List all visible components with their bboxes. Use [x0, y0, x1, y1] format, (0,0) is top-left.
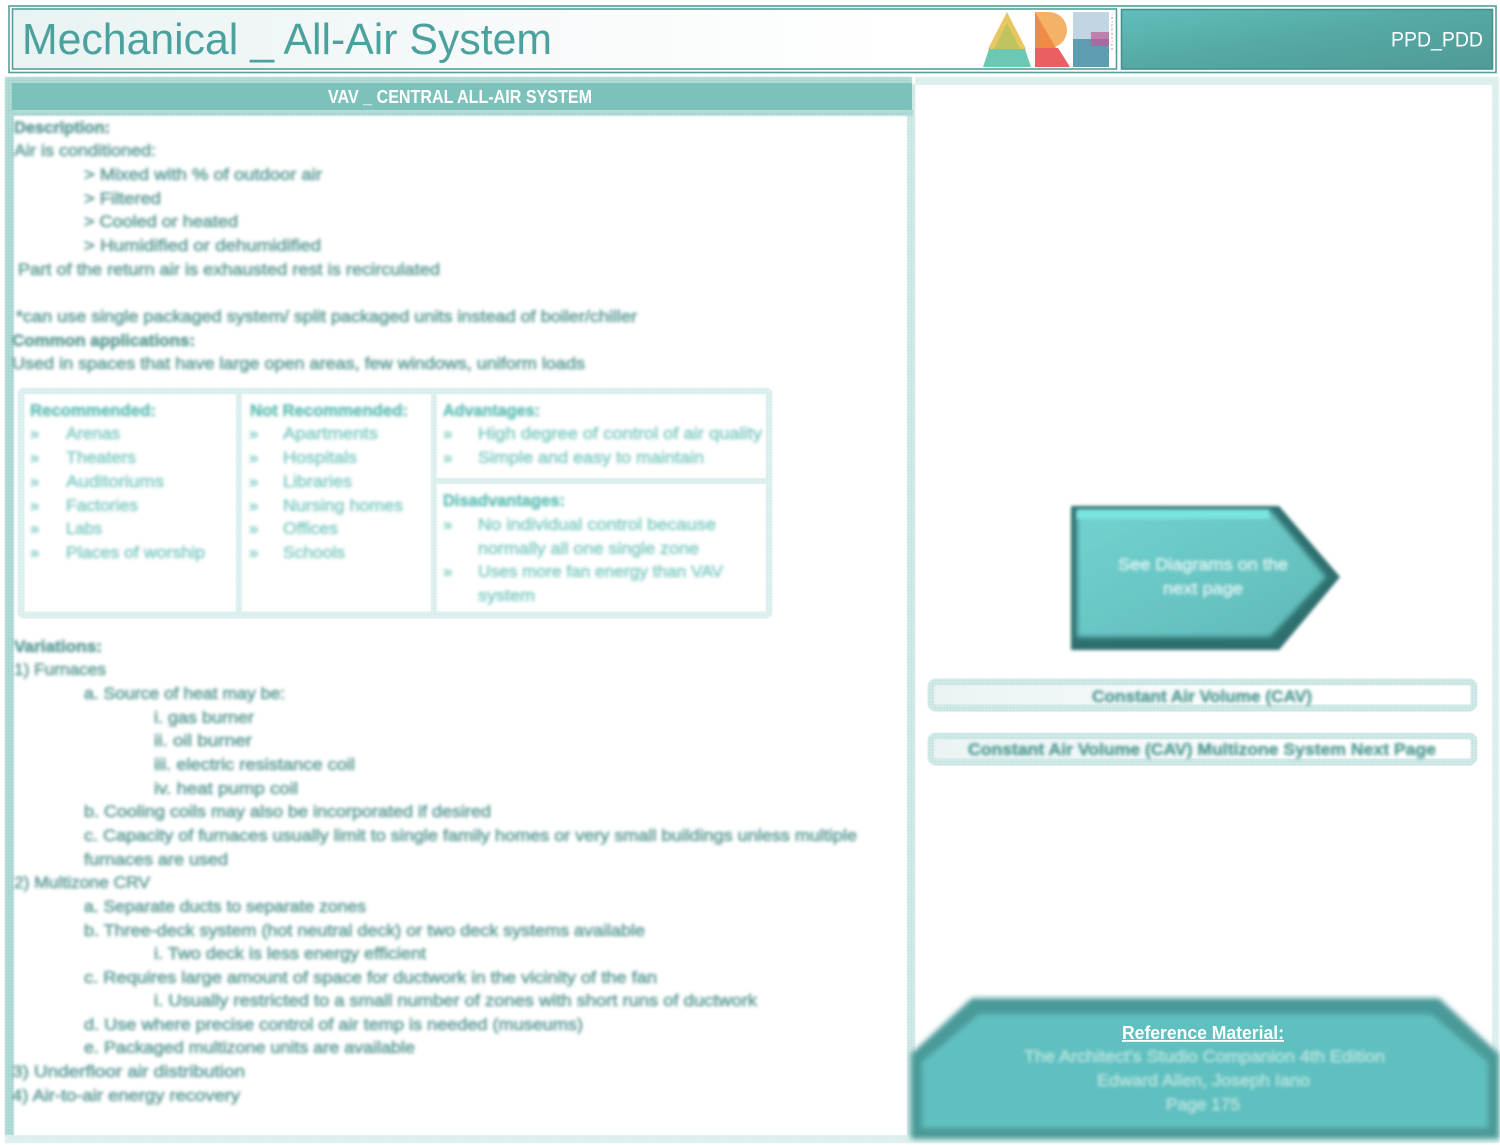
column: not recommended: Nursing homes: [283, 496, 403, 515]
callout citation: [1024, 1047, 1385, 1114]
column: not recommended: »: [249, 543, 258, 562]
panel: PPD_PDD: PPD_PDD: [1391, 28, 1483, 52]
column: not recommended: Not Recommended:: [250, 401, 408, 420]
label bar: constant air volume: [931, 682, 1474, 708]
callout citation: The Architect's Studio Companion 4th Edition: [1024, 1047, 1385, 1066]
column: not recommended: Apartments: [283, 424, 378, 443]
callout citation: Edward Allen, Joseph Iano: [1097, 1071, 1310, 1090]
column: not recommended: »: [249, 448, 258, 467]
column: recommended: Labs: [66, 519, 102, 538]
column: recommended: »: [30, 543, 39, 562]
description text block: Part of the return air is exhausted rest is recirculated: [18, 260, 440, 279]
icon: ARE logo: [983, 12, 1114, 67]
column: recommended: »: [30, 424, 39, 443]
variations text block: ii. oil burner: [154, 731, 252, 750]
column: not recommended: »: [249, 424, 258, 443]
column: advantages and disadvantages: normally all one single zone: [478, 539, 699, 558]
column: recommended: »: [30, 448, 39, 467]
column: advantages and disadvantages: Simple and easy to maintain: [478, 448, 704, 467]
description text block: Description:: [14, 118, 110, 137]
panel: diagrams and references: [911, 77, 1499, 1143]
header: title bar: [9, 6, 1496, 72]
label bar: constant air volume multizone: Constant Air Volume (CAV) Multizone System Next Page: [968, 740, 1436, 759]
variations text block: 2) Multizone CRV: [14, 873, 151, 892]
variations text block: c. Requires large amount of space for ductwork in the vicinity of the fan: [84, 968, 657, 987]
column: not recommended: »: [249, 472, 258, 491]
column: advantages and disadvantages: High degree of control of air quality: [478, 424, 763, 443]
column: not recommended: Hospitals: [283, 448, 357, 467]
panel: PPD_PDD: [1122, 10, 1492, 69]
variations text block: i. Usually restricted to a small number of zones with short runs of ductwork: [154, 991, 758, 1010]
variations text block: iv. heat pump coil: [154, 779, 298, 798]
column: recommended: Theaters: [66, 448, 136, 467]
variations text block: b. Cooling coils may also be incorporated if desired: [84, 802, 491, 821]
variations text block: iii. electric resistance coil: [154, 755, 355, 774]
variations text block: [12, 637, 857, 1105]
column: advantages and disadvantages: »: [443, 424, 452, 443]
column: not recommended: »: [249, 496, 258, 515]
column: not recommended: »: [249, 519, 258, 538]
column: advantages and disadvantages: system: [478, 586, 535, 605]
panel frame: [5, 77, 915, 1143]
description text block: > Mixed with % of outdoor air: [84, 165, 322, 184]
table grid: [21, 391, 769, 615]
column: recommended: Factories: [66, 496, 138, 515]
column: advantages and disadvantages: [443, 401, 763, 605]
description text block: [12, 118, 637, 373]
variations text block: i. gas burner: [154, 708, 254, 727]
column: advantages and disadvantages: »: [443, 448, 452, 467]
variations text block: b. Three-deck system (hot neutral deck) or two deck systems available: [84, 921, 645, 940]
title panel: [12, 9, 1116, 69]
arrow: see diagrams on next page: [1071, 506, 1340, 650]
column: not recommended: [249, 401, 408, 562]
heading bar: VAV _ CENTRAL ALL-AIR SYSTEM: [328, 87, 592, 107]
heading bar: [10, 83, 913, 116]
description text block: > Humidified or dehumidified: [84, 236, 321, 255]
column: recommended: Places of worship: [66, 543, 205, 562]
title: Mechanical _ All-Air System: [22, 15, 552, 64]
column: advantages and disadvantages: Uses more fan energy than VAV: [478, 562, 724, 581]
column: advantages and disadvantages: Disadvantages:: [443, 491, 565, 510]
variations text block: Variations:: [14, 637, 102, 656]
variations text block: 3) Underfloor air distribution: [12, 1062, 245, 1081]
column: recommended: [30, 401, 205, 562]
variations text block: c. Capacity of furnaces usually limit to single family homes or very small buildings unless multiple: [84, 826, 857, 845]
table: recommendations and trade-offs: [21, 391, 769, 615]
label bar: constant air volume: Constant Air Volume (CAV): [1092, 687, 1312, 706]
panel frame: [913, 77, 1499, 1143]
column: recommended: »: [30, 519, 39, 538]
variations text block: a. Source of heat may be:: [84, 684, 285, 703]
variations text block: a. Separate ducts to separate zones: [84, 897, 366, 916]
description text block: Common applications:: [12, 331, 195, 350]
column: advantages and disadvantages: »: [443, 562, 452, 581]
column: recommended: Arenas: [66, 424, 120, 443]
callout heading: Reference Material:: [1122, 1023, 1284, 1043]
column: recommended: Recommended:: [30, 401, 156, 420]
column: recommended: »: [30, 472, 39, 491]
column: advantages and disadvantages: Advantages:: [443, 401, 540, 420]
arrow: see diagrams on next page: See Diagrams on the: [1118, 555, 1288, 574]
variations text block: 4) Air-to-air energy recovery: [12, 1086, 241, 1105]
variations text block: e. Packaged multizone units are available: [84, 1038, 415, 1057]
column: advantages and disadvantages: »: [443, 515, 452, 534]
variations text block: furnaces are used: [84, 850, 228, 869]
callout citation: Page 175: [1166, 1095, 1240, 1114]
panel: VAV central all-air system: [5, 77, 915, 1143]
label bar: constant air volume multizone: [931, 736, 1474, 762]
description text block: Air is conditioned:: [14, 141, 156, 160]
description text block: Used in spaces that have large open areas, few windows, uniform loads: [12, 354, 585, 373]
arrow: see diagrams on next page: next page: [1163, 579, 1243, 598]
icon: ARE logo: INTEGRATED: [1110, 14, 1114, 52]
column: recommended: Auditoriums: [66, 472, 164, 491]
description text block: > Cooled or heated: [84, 212, 238, 231]
callout: reference material: [911, 998, 1499, 1139]
variations text block: 1) Furnaces: [14, 660, 106, 679]
description text block: *can use single packaged system/ split packaged units instead of boiler/chiller: [16, 307, 637, 326]
column: advantages and disadvantages: No individual control because: [478, 515, 716, 534]
variations text block: i. Two deck is less energy efficient: [154, 944, 426, 963]
description text block: > Filtered: [84, 189, 161, 208]
column: not recommended: Schools: [283, 543, 345, 562]
column: not recommended: Libraries: [283, 472, 352, 491]
column: recommended: »: [30, 496, 39, 515]
column: not recommended: Offices: [283, 519, 338, 538]
variations text block: d. Use where precise control of air temp is needed (museums): [84, 1015, 583, 1034]
